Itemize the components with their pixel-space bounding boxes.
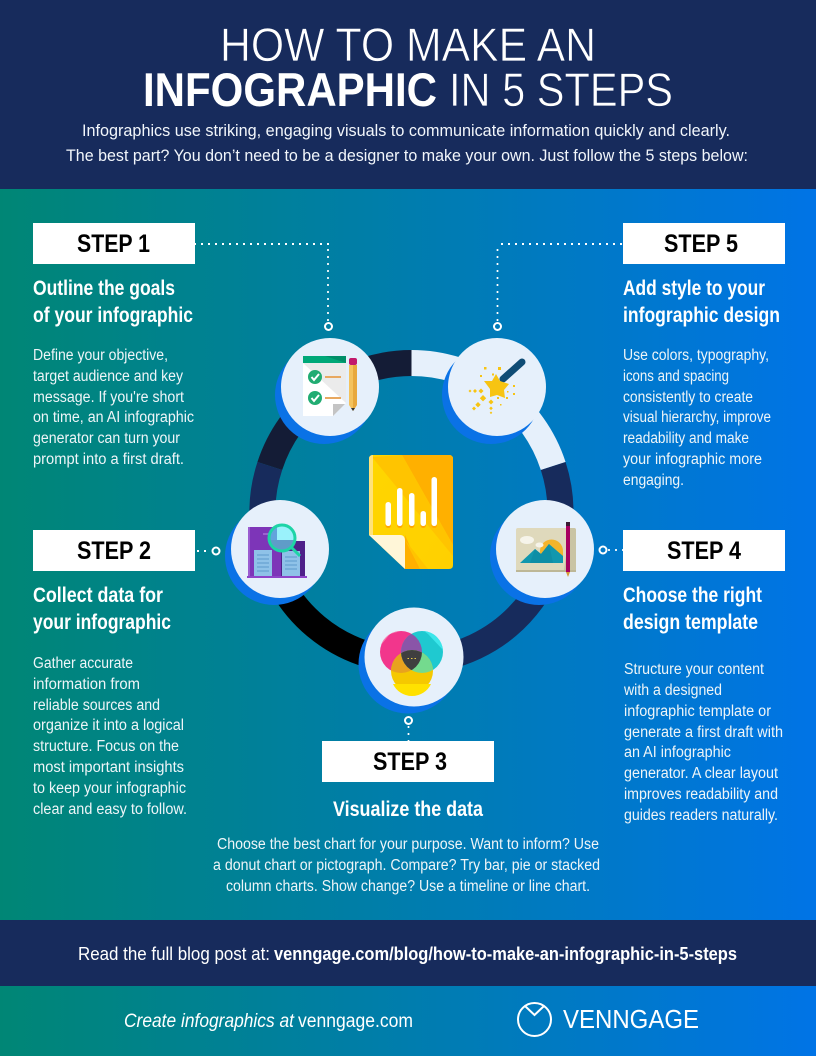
step 5 label: STEP 5 [664,230,738,258]
footer [0,986,816,1056]
step 4 heading: design template [623,611,758,634]
step 2 heading [33,584,171,634]
step 5 heading: Add style to your [623,277,765,300]
step 2 body: information from [33,676,140,693]
step 4 body [623,661,783,824]
step 1 body: on time, an AI infographic [33,409,194,426]
panel: step 3 [213,741,600,895]
step 4 body: Structure your content [624,661,765,678]
connector: step 3 [405,717,412,741]
step 2 body: reliable sources and [33,697,160,714]
step 2 label [33,530,195,571]
background panel [0,189,816,920]
step 5 body: icons and spacing [623,368,729,385]
step 4 body: generate a first draft with [624,724,783,741]
intro text: Infographics use striking, engaging visuals to communicate information quickly and clearly. [82,122,730,140]
step 3 heading: Visualize the data [333,798,483,821]
step 4 body: guides readers naturally. [624,807,778,824]
step 3 label [322,741,494,782]
step 2 body [33,655,187,818]
step 5 body: Use colors, typography, [623,347,769,364]
venngage logo [518,1003,699,1036]
panel: step 2 [33,530,195,818]
footer tagline [124,1011,413,1032]
step 1 heading: of your infographic [33,304,193,327]
icon: step 4 landscape canvas [490,500,594,605]
connector: step 1 [194,244,332,330]
connector: step 2 [197,548,220,554]
circular ring [262,363,560,661]
step 2 heading: Collect data for [33,584,163,607]
step 5 heading: infographic design [623,304,780,327]
title: INFOGRAPHIC [143,63,437,116]
step 1 body: Define your objective, [33,347,168,364]
step 2 heading: your infographic [33,611,171,634]
step 3 body: column charts. Show change? Use a timeline or line chart. [226,878,590,895]
panel: step 5 [623,223,785,489]
step 5 body: engaging. [623,472,684,489]
step 4 body: an AI infographic [624,744,731,761]
step 1 body: generator can turn your [33,430,180,447]
step 4 label: STEP 4 [667,537,741,565]
footer tagline: venngage.com [298,1011,413,1032]
step 2 body: clear and easy to follow. [33,801,187,818]
step 4 body: infographic template or [624,703,771,720]
step 2 body: Gather accurate [33,655,133,672]
icon: step 5 magic wand [442,338,546,444]
step 5 label [623,223,785,264]
panel: step 1 [33,223,195,468]
icon: step 3 venn diagram [358,608,464,714]
blog link band [0,920,816,986]
icon: step 1 checklist [275,338,379,444]
step 1 body: prompt into a first draft. [33,451,184,468]
step 2 body: most important insights [33,759,184,776]
footer tagline: Create infographics at [124,1011,295,1032]
panel: step 4 [623,530,785,824]
step 2 body: organize it into a logical [33,717,184,734]
step 2 body: to keep your infographic [33,780,186,797]
step 1 body [33,347,194,468]
step 2 label: STEP 2 [77,537,151,565]
step 4 body: generator. A clear layout [624,765,779,782]
step 1 heading: Outline the goals [33,277,175,300]
step 4 body: with a designed [623,682,722,699]
blog link band: Read the full blog post at: [78,944,270,964]
step 5 body: your infographic more [623,451,762,468]
step 1 label: STEP 1 [77,230,150,258]
title: IN 5 STEPS [449,63,673,116]
step 4 heading [623,584,762,634]
step 3 body: Choose the best chart for your purpose. Want to inform? Use [217,836,599,853]
step 4 heading: Choose the right [623,584,762,607]
step 5 body: consistently to create [623,389,753,406]
step 3 body [213,836,600,895]
step 5 body: readability and make [623,430,749,447]
title: HOW TO MAKE AN [220,18,596,71]
icon: step 2 data research [225,500,329,605]
title [143,18,673,116]
step 1 body: message. If you're short [33,389,185,406]
step 2 body: structure. Focus on the [33,738,179,755]
intro text [66,122,748,165]
header panel [0,0,816,189]
step 5 heading [623,277,780,327]
step 5 body: visual hierarchy, improve [623,409,771,426]
step 5 body [623,347,771,489]
connector: step 5 [494,244,622,330]
step 1 label [33,223,195,264]
step 1 body: target audience and key [33,368,183,385]
step 3 body: a donut chart or pictograph. Compare? Try bar, pie or stacked [213,857,600,874]
step 4 body: improves readability and [624,786,778,803]
blog link band: venngage.com/blog/how-to-make-an-infographic-in-5-steps [274,944,737,964]
step 4 label [623,530,785,571]
venngage logo: VENNGAGE [563,1004,699,1034]
intro text: The best part? You don’t need to be a designer to make your own. Just follow the 5 steps below: [66,147,748,165]
step 3 label: STEP 3 [373,748,447,776]
icon: central document chart [369,455,453,569]
connector: step 4 [600,546,623,554]
step 1 heading [33,277,193,327]
